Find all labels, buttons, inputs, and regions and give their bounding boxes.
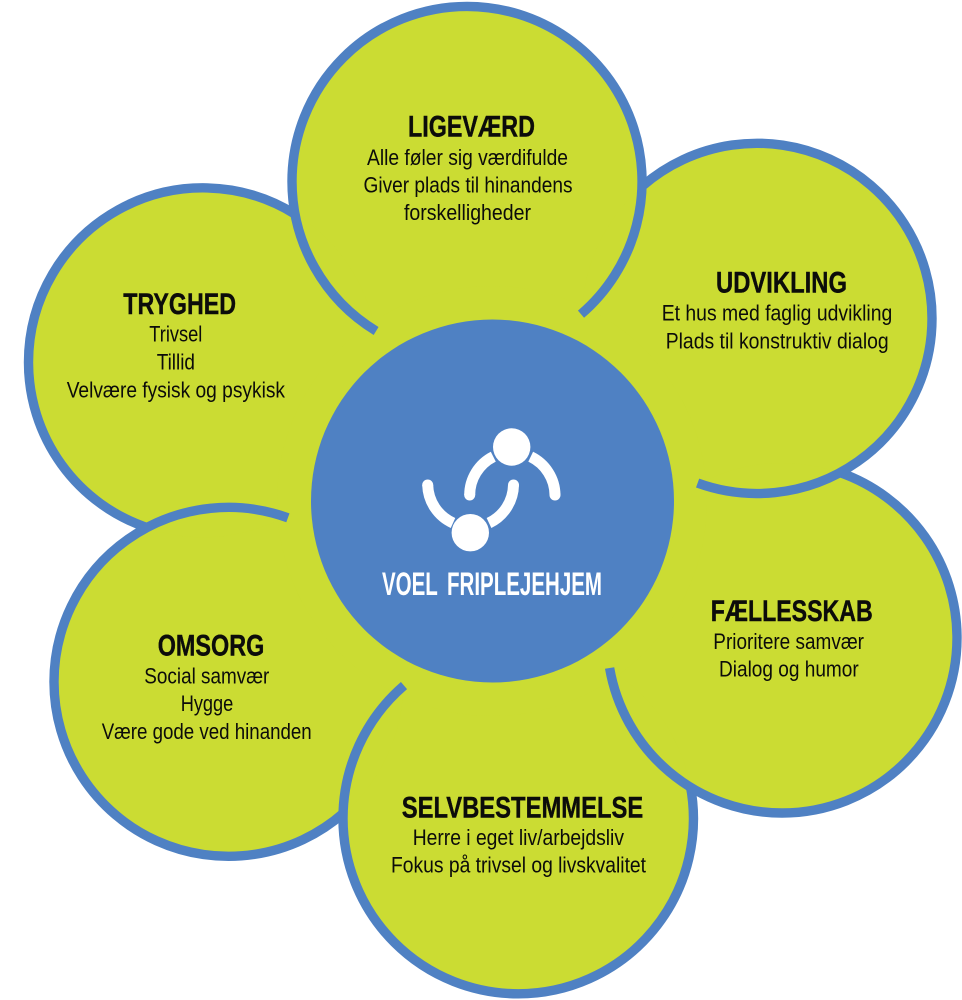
outline: udvikling xyxy=(642,143,932,493)
heading: TRYGHED xyxy=(123,288,236,321)
icon: voel logo xyxy=(428,428,555,551)
line 3: Velvære fysisk og psykisk xyxy=(67,377,286,402)
line 1: Alle føler sig værdifulde xyxy=(367,145,568,170)
outline: selvbestemmelse xyxy=(343,686,693,994)
heading: OMSORG xyxy=(158,630,264,663)
panel: omsorg xyxy=(102,630,312,744)
line 2: Giver plads til hinandens xyxy=(364,172,572,198)
line 2: Fokus på trivsel og livskvalitet xyxy=(391,853,647,878)
panel: ligeværd xyxy=(364,110,572,225)
center title: VOEL FRIPLEJEHJEM xyxy=(382,566,602,602)
heading: FÆLLESSKAB xyxy=(711,595,873,628)
line 2: Hygge xyxy=(181,691,233,716)
line 1: Trivsel xyxy=(149,322,202,347)
outline: fællesskab xyxy=(610,473,957,813)
center circle xyxy=(311,320,674,682)
line 1: Social samvær xyxy=(144,663,270,688)
heading: UDVIKLING xyxy=(716,267,847,300)
outline: tryghed xyxy=(28,188,295,528)
heading: SELVBESTEMMELSE xyxy=(402,791,643,824)
line 2: Dialog og humor xyxy=(719,657,859,682)
line 3: forskelligheder xyxy=(404,200,531,225)
panel: udvikling xyxy=(662,267,892,353)
line 3: Være gode ved hinanden xyxy=(102,719,312,744)
panel: fællesskab xyxy=(711,595,873,682)
panel: tryghed xyxy=(67,288,286,402)
line 1: Prioritere samvær xyxy=(713,629,864,654)
line 2: Plads til konstruktiv dialog xyxy=(666,328,889,353)
panel: selvbestemmelse xyxy=(391,791,647,878)
line 1: Herre i eget liv/arbejdsliv xyxy=(413,825,625,850)
outline: omsorg xyxy=(54,507,344,856)
outline: ligeværd xyxy=(292,6,642,331)
line 1: Et hus med faglig udvikling xyxy=(662,301,892,326)
line 2: Tillid xyxy=(157,349,195,374)
heading: LIGEVÆRD xyxy=(408,110,535,144)
